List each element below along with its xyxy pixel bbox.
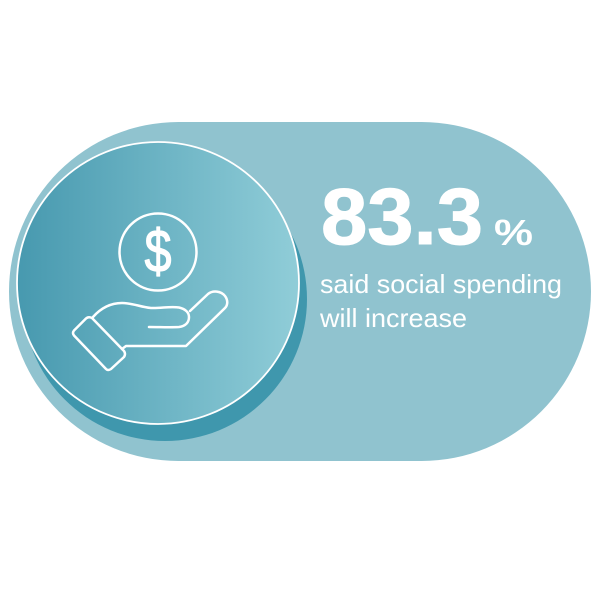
icon: coin: $ <box>144 218 172 284</box>
circle shadow <box>23 157 307 441</box>
description line 2: will increase <box>319 303 467 333</box>
icon: hand holding coin <box>73 214 227 370</box>
main gradient circle <box>17 142 299 424</box>
percent sign: % <box>494 212 533 253</box>
background pill panel <box>9 122 591 461</box>
description line 1: said social spending <box>320 269 562 299</box>
icon: cuff <box>73 317 125 370</box>
icon: hand <box>93 303 189 327</box>
icon: coin <box>120 214 196 290</box>
statistic value: 83.3 <box>321 172 483 261</box>
icon: fingers <box>122 292 227 349</box>
